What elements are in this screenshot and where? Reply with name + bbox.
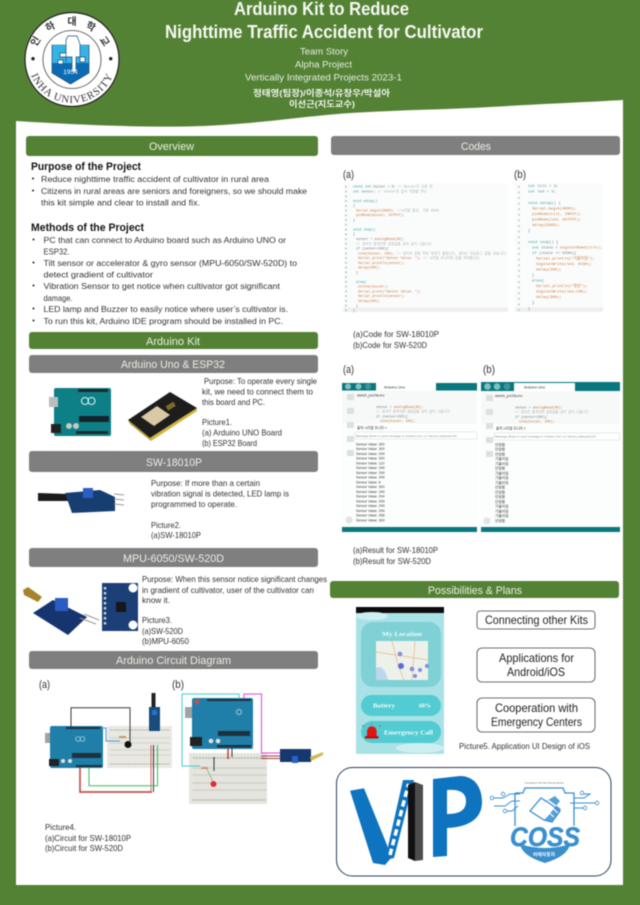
title — [165, 0, 483, 42]
serial monitor result (b) — [481, 364, 620, 532]
text block: MPU-6050 and SW-520D purpose: (b)MPU-6050 — [142, 636, 189, 646]
serial monitor result (a): Sensor Value: 299 — [356, 509, 385, 513]
code listing (b): pinMode(led, OUTPUT); — [532, 218, 581, 222]
icon: Inha University seal: 인 — [28, 34, 43, 49]
serial monitor result (b): 안정함 — [495, 447, 506, 452]
logo panel — [336, 768, 611, 876]
serial monitor result (a): Arduino Uno — [384, 386, 405, 390]
serial monitor result (b): 안정함 — [495, 494, 506, 499]
team and project info — [245, 46, 402, 84]
caption: code — [353, 329, 439, 350]
caption: picture 5: Picture5. Application UI Design of iOS — [459, 741, 590, 751]
code listing (b): delay(300); — [536, 268, 562, 272]
serial monitor result (a): Sensor Value: 256 — [356, 514, 385, 518]
code listing (a): if (sensor<200){ — [356, 246, 389, 252]
text block: SW-18010P purpose: programmed to operate. — [151, 499, 237, 509]
serial monitor result (a): Sensor Value: 122 — [356, 462, 385, 466]
text block: SW-18010P purpose: vibration signal is detected, LED lamp is — [151, 488, 289, 498]
text block: methods of the project: To run this kit, Arduino IDE program should be installed in PC. — [44, 316, 283, 326]
caption: code: (a)Code for SW-18010P — [353, 329, 439, 339]
serial monitor result (b): 기울어짐 — [495, 456, 509, 461]
text block: purpose of the project: Reduce nighttime traffic accident of cultivator in rural area — [41, 174, 269, 184]
image: ESP32 board — [128, 392, 197, 441]
code listing (a): sensor = analogRead(A0); — [356, 237, 405, 242]
text block: Arduino and ESP32 purpose — [202, 376, 317, 448]
team and project info: Team Story — [300, 46, 348, 58]
code listing (a): Serial.begin(9600); //시리얼 통신, 기본 9600 — [356, 207, 439, 213]
serial monitor result (a): Sensor Value: 300 — [356, 457, 385, 461]
code listing (a): (a) — [343, 169, 354, 181]
text block: MPU-6050 and SW-520D purpose: know it. — [142, 595, 170, 605]
text block: purpose of the project: this kit simple and clear to install and fix. — [41, 198, 200, 208]
code listing (b): } — [532, 300, 534, 306]
code listing (a): } — [356, 304, 358, 309]
serial monitor result (a): Sensor Value: 6 — [356, 480, 381, 484]
serial monitor result (b): 기울어짐 — [495, 504, 509, 509]
code listing (a): Serial.println(sensor); — [358, 261, 405, 266]
serial monitor result (a) — [342, 364, 477, 532]
emergency call pill: Emergency Call — [384, 730, 433, 736]
icon: Inha University seal: 학 — [84, 19, 98, 34]
code listing (b): } — [528, 228, 530, 234]
text block: methods of the project: detect gradient of cultivator — [44, 270, 153, 280]
plan box: applications: Android/iOS — [507, 665, 565, 679]
serial monitor result (a): Sensor Value: 300 — [356, 447, 385, 451]
serial monitor result (b): (b) — [483, 364, 495, 376]
team members: 이선근(지도교수) — [289, 98, 355, 109]
heading: SW-18010P: SW-18010P — [146, 457, 202, 469]
heading: Possibilities and Plans — [330, 581, 619, 598]
plan box: applications — [477, 648, 595, 682]
serial monitor result (b): // 센서가 충격이면 일정값을 넘어 값이 나옵니다 — [515, 409, 588, 414]
circuit diagram (a): (a) — [39, 679, 50, 691]
caption: picture 4: (b)Circuit for SW-520D — [45, 843, 123, 853]
serial monitor result (a): Message (Enter to send message to 'Arduino Uno' on '/dev/cu.usbserial-10') — [356, 434, 457, 438]
serial monitor result (a): tone(buzzer, 500); — [380, 419, 416, 423]
team and project info: Vertically Integrated Projects 2023-1 — [245, 72, 402, 84]
serial monitor result (a): Sensor Value: 300 — [356, 442, 385, 446]
code listing (a): delay(500); — [358, 266, 380, 271]
heading: Arduino Uno and ESP32 — [29, 355, 318, 373]
text block: methods of the project: LED lamp and Buzzer to easily notice where user’s cultivator is. — [44, 304, 288, 314]
image: Arduino UNO board — [49, 388, 111, 436]
heading: Arduino Uno and ESP32: Arduino Uno & ESP32 — [121, 359, 225, 371]
caption: results: (a)Result for SW-18010P — [353, 545, 438, 555]
caption: picture 4: Picture4. — [45, 822, 76, 832]
text block: MPU-6050 and SW-520D purpose: (a)SW-520D — [142, 626, 183, 636]
caption: picture 4 — [45, 822, 131, 853]
logo: COSS — [490, 782, 599, 863]
code listing (b): pinMode(tilt, INPUT); — [532, 212, 581, 217]
code listing (b): int tilt = 3; — [528, 184, 558, 189]
serial monitor result (b): Arduino Uno — [524, 386, 545, 390]
text block: methods of the project: ESP32. — [44, 246, 70, 256]
text block: Arduino and ESP32 purpose: Picture1. — [202, 417, 232, 427]
plan box: cooperation: Cooperation with — [495, 701, 578, 715]
serial monitor result (a): Sensor Value: 299 — [356, 504, 385, 508]
code listing (b): digitalWrite(led, HIGH); — [536, 262, 592, 267]
serial monitor result (a): Sensor Value: 204 — [356, 495, 385, 499]
emergency call pill — [361, 721, 441, 743]
code listing (b): int state = digitalRead(tilt); — [532, 246, 602, 250]
text block: MPU-6050 and SW-520D purpose: in gradient of cultivator, user of the cultivator can — [142, 585, 314, 595]
battery status pill: Battery — [373, 704, 395, 710]
serial monitor result (b): Message (Enter to send message to 'Arduino Uno' on '/dev/cu.usbserial-10') — [495, 434, 596, 438]
code listing (a): } — [356, 270, 358, 275]
text block: Arduino and ESP32 purpose: this board and PC. — [202, 397, 265, 407]
serial monitor result (b): 기울어짐 — [495, 513, 509, 518]
code listing (a): } — [353, 308, 355, 314]
text block: MPU-6050 and SW-520D purpose: Picture3. — [142, 615, 172, 625]
caption: code: (b)Code for SW-520D — [353, 340, 427, 350]
text block: SW-18010P purpose: Picture2. — [151, 520, 181, 530]
caption: picture 4: (a)Circuit for SW-18010P — [45, 833, 131, 843]
code listing (b): Serial.begin(9600); — [532, 206, 576, 212]
caption: results — [353, 545, 438, 566]
code listing (a): { — [353, 232, 355, 237]
logo: VIP — [350, 776, 482, 865]
text block: SW-18010P purpose: (a)SW-18010P — [151, 530, 201, 540]
code listing (a): Serial.print("Sensor Value: "); // 시리얼 모니터에 값을 보여줍니다. — [358, 255, 481, 261]
icon: Inha University seal — [24, 11, 120, 108]
team members — [253, 87, 390, 109]
text block: methods of the project: Methods of the Project — [31, 222, 144, 234]
text block: methods of the project: damage. — [44, 293, 72, 303]
serial monitor result (b): 안정함 — [495, 442, 506, 447]
serial monitor result (a): Sensor Value: 299 — [356, 500, 385, 504]
text block: Arduino and ESP32 purpose: kit, we need to connect them to — [202, 386, 313, 396]
code listing (a): delay(500); — [358, 299, 380, 304]
code listing (a): void setup() — [353, 199, 377, 204]
image: MPU-6050 module — [102, 583, 138, 631]
serial monitor result (b): 기울어짐 — [495, 508, 509, 514]
text block: Arduino and ESP32 purpose: (a) Arduino UNO Board — [202, 428, 282, 438]
serial monitor result (b): 안정함 — [495, 452, 506, 456]
serial monitor result (a): Sensor Value: 300 — [356, 485, 385, 489]
team members: 정태영(팀장)/이종석/유창우/박설아 — [253, 87, 390, 98]
heading: Arduino Kit — [29, 332, 318, 349]
text block: methods of the project: Vibration Sensor to get notice when cultivator got significant — [44, 281, 281, 291]
serial monitor result (b): 안정함 — [495, 518, 506, 523]
title: Nighttime Traffic Accident for Cultivator — [165, 22, 483, 42]
serial monitor result (a): sensor = analogRead(A0); — [376, 405, 424, 409]
heading: MPU-6050/SW-520D: MPU-6050/SW-520D — [123, 553, 224, 565]
heading: SW-18010P — [29, 451, 318, 472]
serial monitor result (a): sketch_jun19a.ino — [357, 394, 384, 398]
code listing (b): } — [532, 273, 534, 278]
code listing (a): else{ — [356, 280, 366, 285]
code listing (b): void loop() { — [528, 240, 559, 245]
serial monitor result (b): 기울어짐 — [495, 470, 509, 476]
heading: Possibilities and Plans: Possibilities & Plans — [428, 585, 522, 597]
image: SW-18010P sensor — [38, 488, 124, 513]
serial monitor result (a): 출력 시리얼 모니터 × — [357, 425, 387, 430]
icon: Inha University seal: 1954 — [63, 69, 78, 76]
serial monitor result (b): sensor = analogRead(A0); — [515, 406, 563, 410]
location card — [361, 622, 441, 687]
text block: purpose of the project — [31, 161, 307, 208]
circuit diagram (a) — [39, 679, 172, 792]
logo: COSS: COSS — [510, 822, 580, 852]
serial monitor result (b): 기울어짐 — [495, 475, 509, 480]
serial monitor result (b): tone(buzzer, 500); — [519, 420, 555, 424]
serial monitor result (a): // 센서가 충격이면 일정값을 넘어 값이 나옵니다 — [376, 408, 449, 414]
code listing (a): noTone(buzzer); — [358, 285, 389, 290]
text block: Arduino and ESP32 purpose: Purpose: To operate every single — [204, 376, 317, 386]
plan box: cooperation — [477, 698, 595, 732]
serial monitor result (b): if (sensor<200){ — [515, 415, 547, 419]
serial monitor result (b): 안정함 — [495, 499, 506, 504]
logo: COSS: 미래자동차 — [533, 851, 556, 858]
serial monitor result (b): sketch_jun19a.ino — [495, 394, 522, 398]
circuit diagram (b): (b) — [172, 679, 184, 691]
icon: Inha University seal: 대 — [67, 15, 77, 28]
heading: Overview — [26, 136, 318, 156]
serial monitor result (b): 출력 시리얼 모니터 × — [496, 426, 526, 430]
icon: Inha University seal: 하 — [43, 19, 57, 34]
logo: COSS: Convergence and Open Sharing System — [524, 782, 564, 784]
heading: Arduino Circuit Diagram — [29, 651, 318, 669]
text block: purpose of the project: Citizens in rural areas are seniors and foreigners, so we should make — [41, 186, 307, 196]
heading: Arduino Circuit Diagram: Arduino Circuit Diagram — [116, 655, 231, 667]
code listing (b): (b) — [514, 169, 526, 181]
code listing (b): Serial.println("정상"); — [536, 283, 588, 289]
code listing (a): tone(buzzer, 500); // 센서의 값에 따라 부저가 울립니다, 센서는 아날로그 값을 읽습니다. — [358, 250, 507, 256]
code listing (b): if (state == HIGH){ — [532, 251, 577, 256]
serial monitor result (a): Sensor Value: 299 — [356, 466, 385, 470]
code listing (a): int sensor; // sensor의 값이 저장될 변수 — [353, 188, 427, 194]
code listing (b): delay(300); — [536, 295, 562, 300]
heading: MPU-6050/SW-520D — [29, 548, 318, 567]
code listing (b): digitalWrite(led,LOW); — [536, 290, 587, 294]
battery status pill — [361, 695, 441, 716]
team and project info: Alpha Project — [295, 60, 352, 70]
serial monitor result (a): Sensor Value: 299 — [356, 490, 385, 494]
code listing (a): pinMode(buzzer, OUTPUT); — [356, 213, 405, 218]
serial monitor result (b): 안정함 — [495, 466, 506, 471]
caption: results: (b)Result for SW-520D — [353, 556, 431, 566]
text block: SW-18010P purpose — [151, 478, 289, 540]
serial monitor result (b): 안정함 — [495, 485, 506, 490]
code listing (b): void setup() { — [528, 201, 561, 206]
heading: Codes — [331, 136, 620, 155]
serial monitor result (b): 안정함 — [495, 490, 506, 494]
code listing (a) — [343, 169, 508, 314]
plan box: cooperation: Emergency Centers — [491, 715, 582, 729]
phone app mockup — [356, 607, 444, 754]
serial monitor result (a): (a) — [343, 364, 354, 376]
serial monitor result (a): Sensor Value: 299 — [356, 452, 385, 456]
code listing (b): delay(5000); — [532, 223, 560, 228]
serial monitor result (a): Sensor Value: 300 — [356, 518, 385, 522]
serial monitor result (b): 기울어짐 — [495, 480, 509, 485]
code listing (b) — [514, 169, 603, 312]
code listing (b): } — [528, 306, 530, 312]
icon: Inha University seal: 교 — [97, 34, 112, 49]
location card: My Location — [382, 631, 423, 638]
text block: methods of the project: Tilt sensor or accelerator & gyro sensor (MPU-6050/SW-520D) to — [44, 258, 297, 268]
heading: Overview: Overview — [149, 141, 194, 153]
code listing (a): // 센서가 충격이면 일정값을 넘어 값이 나옵니다 — [356, 241, 432, 247]
code listing (a): Serial.print("Sensor Value: "); — [358, 289, 421, 294]
icon: Inha University seal: INHA UNIVERSITY — [30, 72, 112, 104]
code listing (a): { — [353, 204, 355, 209]
serial monitor result (b): 기울어짐 — [495, 461, 509, 466]
code listing (a): void loop() — [353, 228, 375, 232]
battery status pill: 60% — [419, 704, 431, 710]
code listing (b): Serial.println("기울어짐"); — [536, 256, 595, 262]
code listing (a): Serial.println(sensor); — [358, 294, 405, 299]
plan box: connecting other kits: Connecting other Kits — [485, 613, 588, 627]
heading: Codes: Codes — [461, 141, 491, 153]
plan box: applications: Applications for — [499, 651, 574, 665]
text block: MPU-6050 and SW-520D purpose — [142, 574, 327, 646]
code listing (a): const int buzzer = 8; // Buzzer의 신호 핀 — [353, 184, 433, 190]
serial monitor result (a): Sensor Value: 299 — [356, 476, 385, 480]
code listing (b): else{ — [532, 278, 544, 284]
text block: methods of the project — [31, 222, 297, 326]
text block: Arduino and ESP32 purpose: (b) ESP32 Board — [202, 438, 257, 448]
circuit diagram (b) — [172, 679, 323, 804]
text block: SW-18010P purpose: Purpose: If more than a certain — [151, 478, 260, 488]
text block: methods of the project: PC that can connect to Arduino board such as Arduino UNO or — [44, 235, 286, 245]
serial monitor result (a): Sensor Value: 299 — [356, 471, 385, 475]
code listing (a): } — [353, 218, 355, 223]
code listing (b): int led = 5; — [528, 190, 556, 194]
serial monitor result (a): if (sensor<200){ — [376, 414, 408, 418]
image: SW-520D sensor — [23, 587, 99, 635]
text block: MPU-6050 and SW-520D purpose: Purpose: When this sensor notice significant changes — [142, 574, 327, 584]
text block: purpose of the project: Purpose of the Project — [31, 161, 141, 173]
heading: Arduino Kit: Arduino Kit — [146, 336, 200, 348]
